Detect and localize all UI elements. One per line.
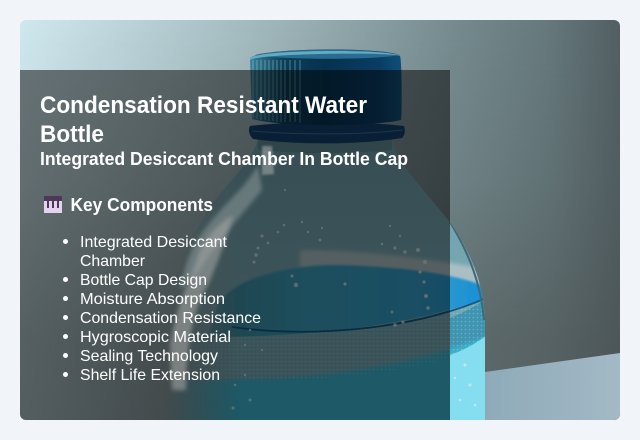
glass highlights [170,146,274,390]
list items: Sealing Technology [80,348,218,365]
grey meniscus [299,249,480,286]
bottle cap [250,49,402,125]
list items [80,234,261,384]
list items: Chamber [80,253,146,270]
overlay panel [20,70,450,420]
title: Bottle [40,121,104,148]
component list [63,234,261,384]
water band [208,264,483,337]
title [40,92,367,148]
list items: Moisture Absorption [80,291,225,308]
list items: Hygroscopic Material [80,329,231,346]
neck ring [249,122,405,153]
section heading: key components: Key Components [70,195,213,215]
list items: Integrated Desiccant [80,234,228,251]
lower water [206,300,484,345]
bottle body [182,140,485,420]
icon: piano keys [44,196,62,213]
right glass edge [450,222,484,320]
list items: Bottle Cap Design [80,272,207,289]
list bullets [63,239,68,377]
droplets [232,164,476,410]
title: Condensation Resistant Water [40,92,367,119]
list items: Condensation Resistance [80,310,261,327]
list items: Shelf Life Extension [80,367,220,384]
waterline [232,299,484,332]
subtitle: Integrated Desiccant Chamber In Bottle Cap [40,149,408,169]
